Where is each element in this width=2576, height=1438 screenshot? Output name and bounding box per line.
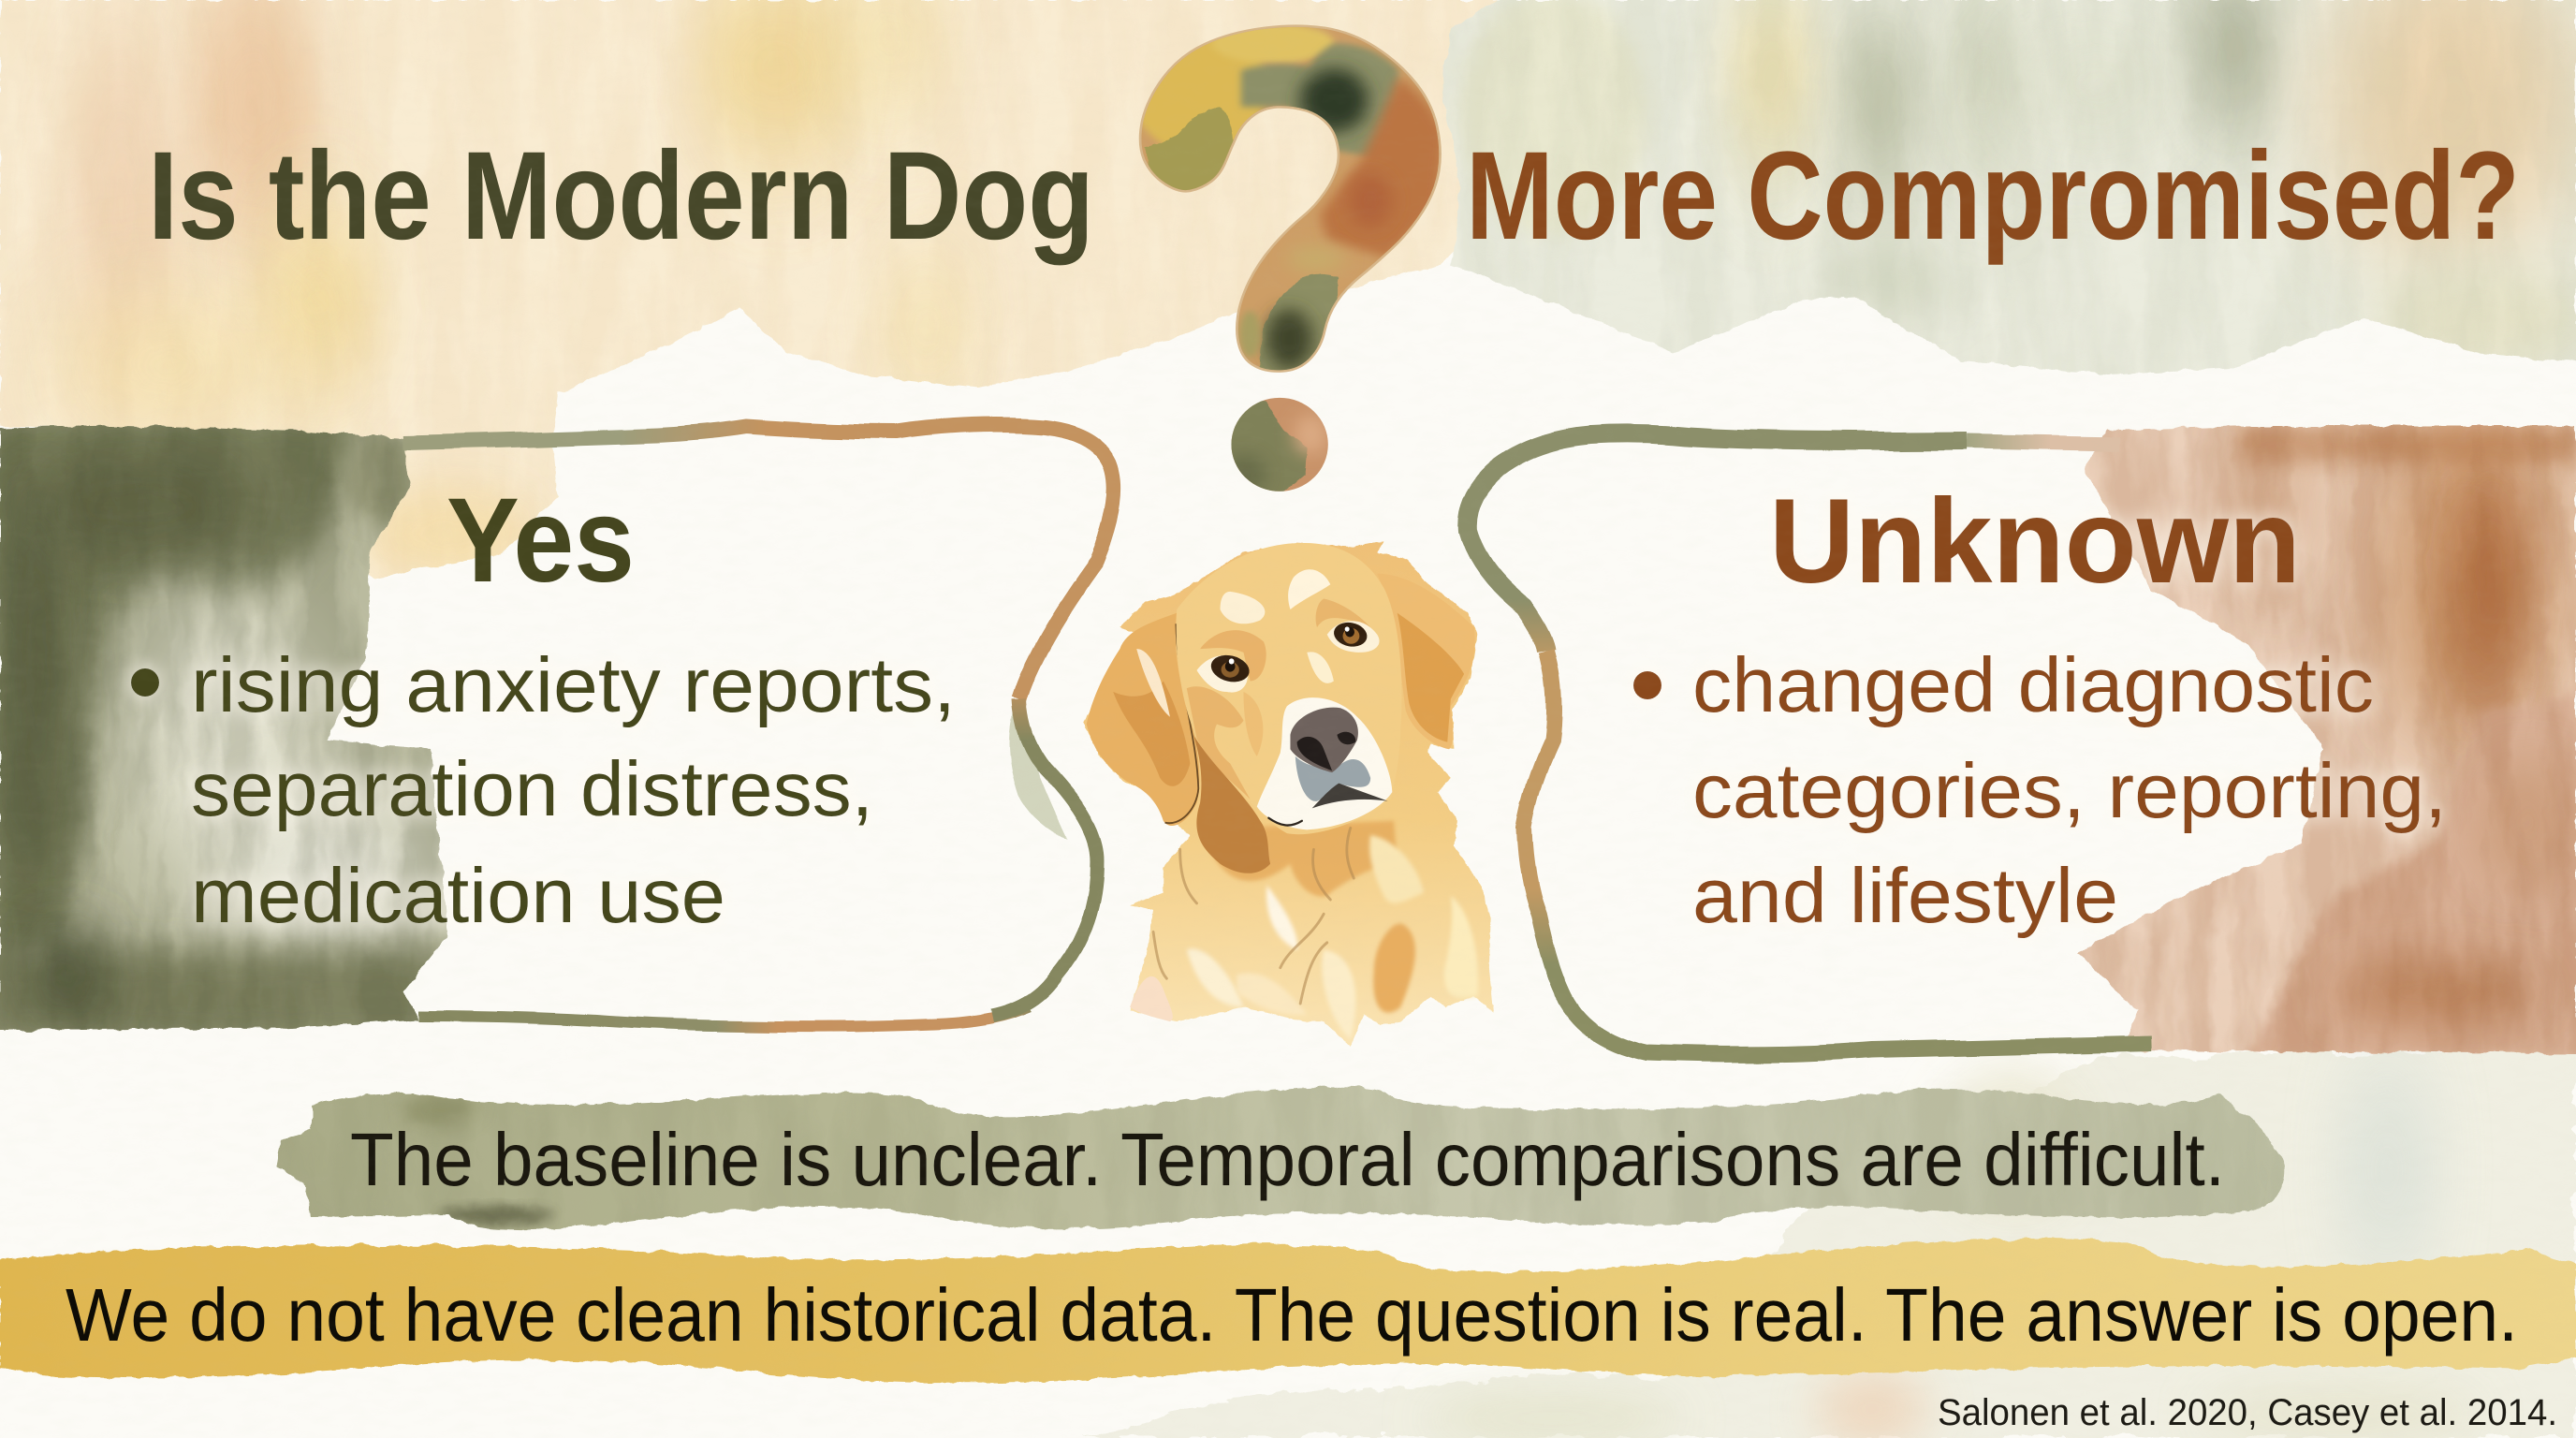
evidence list: Yes: separation distress,: [191, 745, 873, 832]
card frame: Yes: [402, 425, 1115, 1027]
cheek shadow: [1193, 735, 1270, 873]
dog silhouette: [1083, 541, 1494, 1047]
mouth: [1312, 784, 1388, 808]
evidence list: Unknown: [1633, 641, 2447, 939]
evidence list: Unknown: and lifestyle: [1692, 852, 2118, 939]
citation: Salonen et al. 2020, Casey et al. 2014.: [1938, 1392, 2557, 1433]
evidence list: Yes: medication use: [191, 852, 725, 939]
background wash: sage top right: [1442, 0, 2576, 375]
title: left part: Is the Modern Dog: [148, 126, 1094, 266]
callout band: open question: [0, 1238, 2576, 1383]
callout band: baseline unclear: [262, 1077, 2303, 1236]
right ear: [1377, 574, 1475, 749]
terracotta watercolor wash: [2059, 412, 2576, 1067]
eye left: [1208, 652, 1251, 685]
nose: [1290, 708, 1358, 772]
icon: golden retriever portrait: [1083, 541, 1494, 1047]
left ear: [1087, 613, 1199, 826]
muzzle: [1257, 697, 1392, 829]
evidence list: Yes: [131, 641, 956, 939]
olive watercolor wash: [0, 412, 468, 1049]
evidence list: Unknown: categories, reporting,: [1692, 747, 2447, 834]
heading: Unknown: Unknown: [1769, 475, 2301, 609]
panel: Unknown: [1468, 412, 2576, 1067]
evidence list: Yes: rising anxiety reports,: [191, 641, 956, 728]
evidence list: Unknown: changed diagnostic: [1692, 641, 2374, 728]
eye right: [1332, 620, 1368, 650]
chest fur: [1130, 821, 1478, 1039]
background wash: pale sage and peach bottom right: [1084, 1049, 2576, 1438]
background wash: warm cream top left: [0, 0, 1591, 599]
panel: Yes: [0, 412, 1115, 1049]
icon: watercolor question mark: [1130, 17, 1453, 494]
head: [1177, 543, 1402, 834]
dot of question mark: [1223, 394, 1328, 494]
heading: Yes: Yes: [446, 474, 635, 608]
card frame: Unknown: [1468, 434, 2153, 1055]
callout text: baseline unclear: The baseline is unclear. Temporal comparisons are difficult.: [350, 1118, 2225, 1201]
face highlights: [1220, 592, 1265, 624]
